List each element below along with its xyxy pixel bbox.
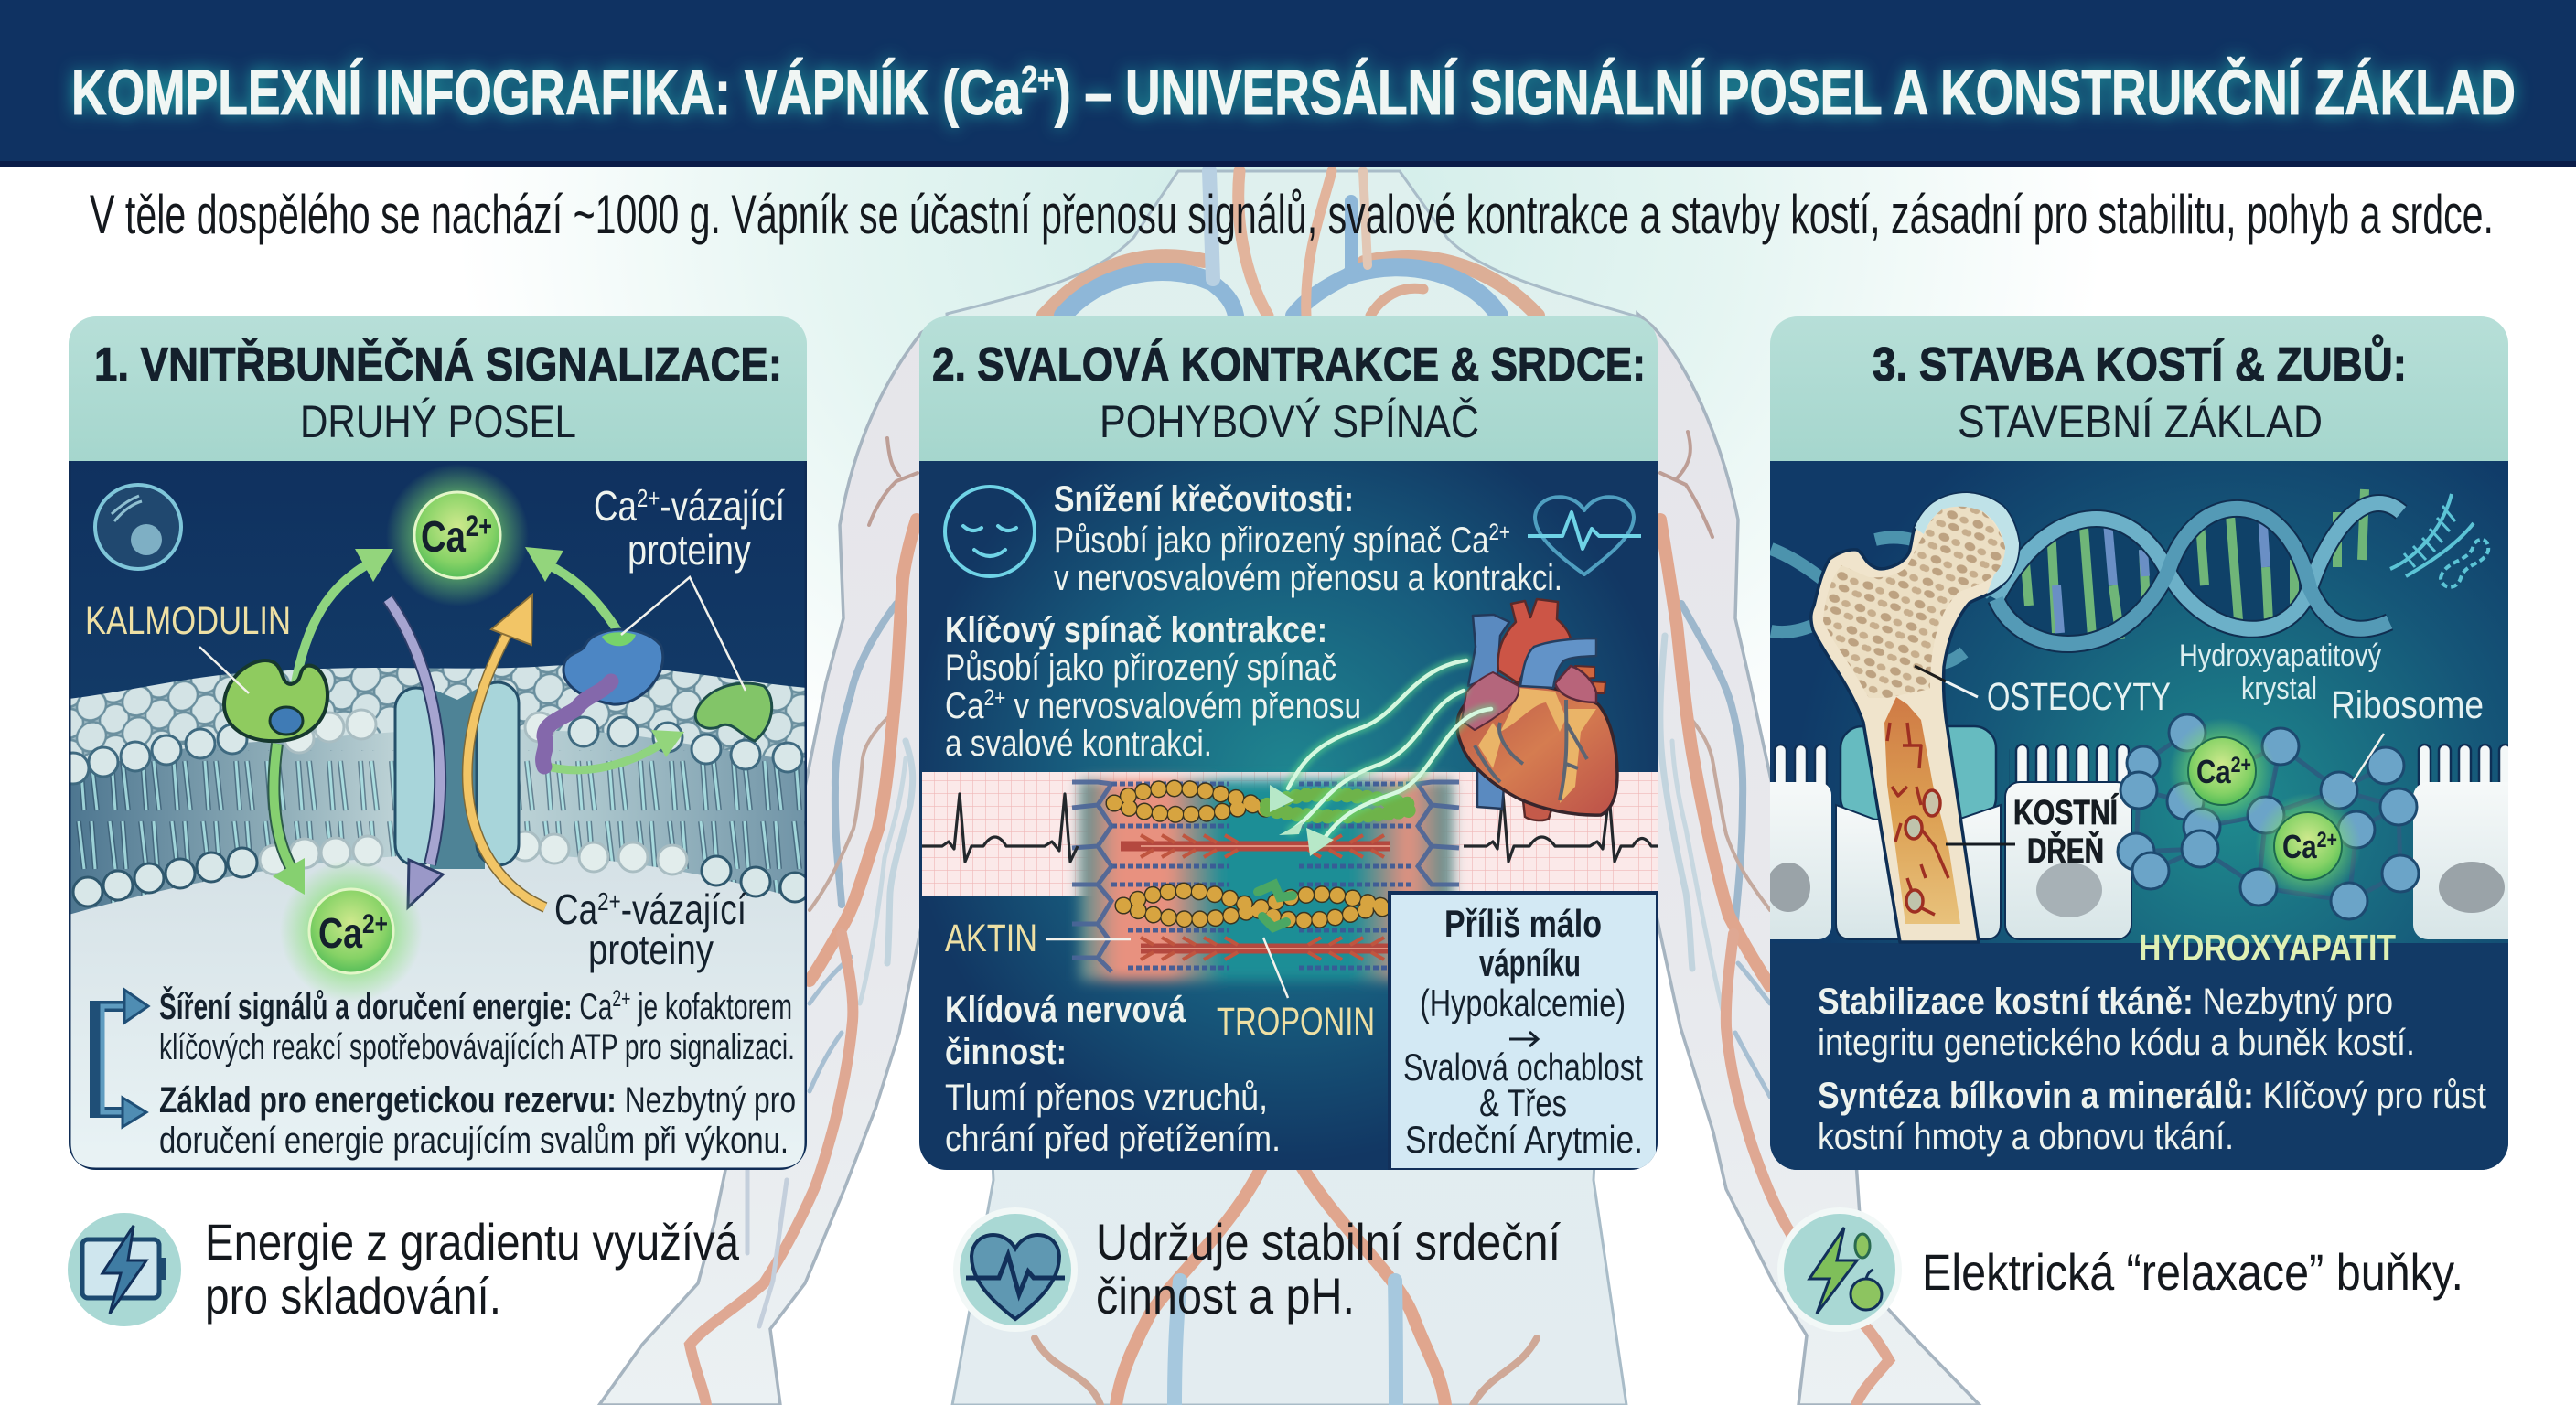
calcium ion top: 2+	[466, 509, 492, 542]
thick filaments	[1121, 835, 1390, 960]
heading: panel 2: 2. SVALOVÁ KONTRAKCE & SRDCE:	[932, 338, 1646, 391]
protein: purple tail	[543, 681, 611, 767]
arrow: leads to	[1509, 1032, 1538, 1046]
label: binding proteins top: -vázající	[660, 482, 785, 530]
text block: panel 3: Stabilizace kostní tkáně: Nezbytný pro	[1818, 981, 2393, 1022]
label: binding proteins bottom: 2+	[597, 887, 621, 916]
fat bands	[1478, 688, 1596, 803]
area below the membrane	[69, 853, 807, 1170]
panel 3 background	[1770, 461, 2508, 1170]
ventricles	[1457, 683, 1617, 815]
text block: contraction switch: v nervosvalovém přenosu	[1005, 686, 1361, 726]
label: binding proteins top: Ca	[594, 482, 648, 530]
text block: panel 1: je kofaktorem	[630, 987, 792, 1027]
vena cava top	[1468, 615, 1509, 686]
icon: small DNA and chain	[2390, 494, 2488, 587]
label: binding proteins bottom: -vázající	[621, 885, 746, 933]
label: binding proteins top	[594, 482, 785, 691]
callout: too little calcium: Příliš málo	[1444, 902, 1602, 945]
label: bone marrow	[1946, 792, 2119, 871]
helix inner shade	[1996, 509, 2310, 644]
text block: panel 1: klíčových reakcí spotřebovávajících ATP pro signalizaci.	[159, 1027, 795, 1067]
DNA rungs	[2024, 489, 2365, 649]
text block: panel 3: kostní hmoty a obnovu tkání.	[1818, 1117, 2234, 1157]
text block: resting nerve activity: Klídová nervová	[945, 990, 1186, 1030]
text block: contraction switch: a svalové kontrakci.	[945, 724, 1212, 764]
membrane tails	[69, 723, 807, 915]
heading: panel 3: STAVEBNÍ ZÁKLAD	[1958, 396, 2323, 447]
text block: panel 1: 2+	[612, 986, 630, 1012]
calcium in crystal: Ca	[2196, 753, 2238, 790]
text block: contraction switch	[945, 610, 1361, 764]
protein: blue binding protein	[564, 629, 663, 704]
label: kalmodulin	[85, 599, 291, 693]
text block: resting nerve activity: činnost:	[945, 1032, 1067, 1072]
label: ribosome	[2331, 683, 2484, 782]
cell membrane	[58, 665, 810, 1170]
label: bone marrow: KOSTNÍ	[2013, 792, 2119, 832]
illustration: femur bone	[1811, 493, 2019, 942]
label: binding proteins bottom: Ca	[554, 885, 608, 933]
callout: too little calcium: (Hypokalcemie)	[1420, 981, 1626, 1024]
actin strands	[1114, 788, 1413, 928]
label: ribosome: Ribosome	[2331, 683, 2484, 727]
vessels in the left arm	[690, 438, 918, 1405]
bone marrow	[1884, 697, 1960, 924]
torso and neck silhouette	[947, 171, 1640, 1405]
bone outline	[1811, 493, 2019, 942]
icon: cell	[95, 485, 181, 569]
text block: reduced cramping: Působí jako přirozený spínač Ca	[1054, 520, 1581, 561]
footer text 1: pro skladování.	[205, 1267, 501, 1325]
right arm	[1637, 314, 1980, 1405]
text block: panel 1: Šíření signálů a doručení energie: Ca	[159, 987, 746, 1027]
arrow: green down from calmodulin	[273, 744, 305, 895]
label: hydroxyapatit: HYDROXYAPATIT	[2139, 927, 2396, 969]
panel: 2 muscle contraction and heart	[919, 316, 1658, 1170]
callout: too little calcium	[1390, 893, 1658, 1170]
label: osteocyty: OSTEOCYTY	[1987, 675, 2171, 719]
text block: reduced cramping: Snížení křečovitosti:	[1054, 479, 1354, 520]
heading: panel 3	[1873, 334, 2407, 447]
panel: 3 bones and teeth	[1756, 316, 2523, 1170]
DNA helix	[1771, 489, 2401, 664]
protein: calmodulin	[224, 660, 327, 741]
label: troponin: TROPONIN	[1217, 1000, 1375, 1044]
epithelial cells	[1756, 726, 2523, 939]
arrow: green to right protein	[544, 730, 684, 770]
footer text 1	[205, 1213, 740, 1325]
ECG strip and muscle	[922, 772, 1658, 981]
heading: panel 1: DRUHÝ POSEL	[300, 396, 576, 447]
myosin dashes	[1111, 784, 1413, 968]
heading: panel 1: 1. VNITŘBUNĚČNÁ SIGNALIZACE:	[94, 338, 782, 391]
calcium ion top	[386, 464, 529, 606]
muscle sarcomere	[1072, 779, 1459, 981]
calcium ion bottom: 2+	[362, 909, 388, 939]
text block: panel 1	[159, 985, 796, 1161]
footer text 2: Udržuje stabilní srdeční	[1096, 1213, 1561, 1271]
label: osteocyty	[1915, 666, 2171, 719]
z-lines	[1072, 782, 1459, 971]
callout: too little calcium: Srdeční Arytmie.	[1405, 1118, 1643, 1161]
callout: too little calcium: Svalová ochablost	[1403, 1046, 1643, 1089]
spongy bone	[1823, 507, 2005, 698]
text block: contraction switch: Působí jako přirozený spínač	[945, 648, 1336, 688]
icon: battery with bolt	[68, 1213, 181, 1326]
icon: bolt and apple	[1777, 1207, 1902, 1332]
pulmonary artery	[1520, 638, 1596, 688]
calcium ion bottom: Ca	[318, 909, 372, 957]
arrow: green up from binding protein	[525, 547, 618, 632]
lower leaflet heads	[73, 848, 810, 906]
arrow: orange outward	[467, 595, 545, 907]
arrow: green up from calmodulin	[295, 549, 393, 688]
text block: panel 3: Syntéza bílkovin a minerálů: Klíčový pro růst	[1818, 1076, 2486, 1116]
femoral head cap	[1915, 493, 2019, 594]
icon: heart pulse	[953, 1207, 1078, 1332]
sarcomere soft base	[1079, 779, 1453, 981]
footer text 2: činnost a pH.	[1096, 1267, 1355, 1325]
crystal bonds	[2136, 733, 2400, 901]
vessels left of the neck	[1044, 171, 1268, 316]
coronary vessels	[1475, 700, 1587, 800]
panel 2 background	[919, 461, 1658, 1170]
vena cava bottom	[1477, 764, 1504, 809]
calcium in crystal	[2169, 718, 2275, 824]
footer text 1: Energie z gradientu využívá	[205, 1213, 740, 1271]
callout: too little calcium: vápníku	[1479, 941, 1581, 984]
right atrium	[1555, 666, 1596, 702]
label: binding proteins top: 2+	[637, 484, 660, 512]
text block: reduced cramping: 2+	[1488, 520, 1510, 545]
panel 3 header band	[1770, 316, 2508, 461]
icon: bracket arrows	[95, 990, 148, 1127]
label: aktin: AKTIN	[945, 917, 1037, 960]
heading: panel 2: POHYBOVÝ SPÍNAČ	[1100, 396, 1479, 447]
heading: panel 3: 3. STAVBA KOSTÍ & ZUBŮ:	[1873, 334, 2407, 391]
text block: contraction switch: Klíčový spínač kontrakce:	[945, 610, 1327, 650]
descending vessel	[1523, 800, 1551, 820]
label: binding proteins bottom: proteiny	[588, 926, 714, 973]
label: troponin	[1217, 938, 1375, 1044]
footer text 2	[1096, 1213, 1561, 1325]
text block: resting nerve activity: chrání před přetížením.	[945, 1119, 1281, 1159]
background: human body with vessels	[599, 171, 1980, 1405]
title: 2+	[1021, 58, 1055, 101]
heading: panel 1	[94, 338, 782, 447]
vessels in the right arm	[1660, 432, 1889, 1405]
molecule: hydroxyapatite crystal: 2+	[2317, 828, 2337, 853]
text block: panel 1: doručení energie pracujícím svalům při výkonu.	[159, 1121, 789, 1161]
text block: contraction switch: 2+	[984, 685, 1005, 711]
footer text 3: Elektrická “relaxace” buňky.	[1922, 1243, 2463, 1301]
label: kalmodulin: KALMODULIN	[85, 599, 291, 643]
label: bone marrow: DŘEŇ	[2027, 831, 2104, 871]
icon: relaxed face	[945, 487, 1035, 576]
left atrium	[1462, 672, 1519, 730]
protein: green right	[695, 683, 772, 741]
calcium ion top: Ca	[421, 513, 477, 562]
text block: panel 3: integritu genetického kódu a buněk kostí.	[1818, 1023, 2415, 1063]
vessels in the lower torso	[1035, 1162, 1537, 1405]
aorta	[1498, 599, 1571, 683]
vessels right of the neck	[1293, 171, 1538, 316]
panel 2 header band	[919, 316, 1658, 461]
ECG traces	[922, 794, 1658, 862]
icon: heart with pulse	[1528, 497, 1641, 574]
text block: panel 3	[1818, 981, 2486, 1157]
title: KOMPLEXNÍ INFOGRAFIKA: VÁPNÍK (Ca	[71, 57, 1316, 128]
upper leaflet front heads	[58, 717, 802, 784]
small orange tabs	[1575, 666, 1605, 693]
illustration: heart	[1457, 599, 1617, 820]
text block: reduced cramping: v nervosvalovém přenosu a kontrakci.	[1054, 558, 1562, 598]
label: binding proteins top: proteiny	[628, 526, 751, 574]
molecule: hydroxyapatite crystal	[2118, 714, 2419, 919]
label: hydroxyapatite crystal	[2179, 638, 2381, 706]
text block: reduced cramping	[1054, 479, 1562, 598]
heading: panel 2	[932, 338, 1646, 447]
panel 1 diagram background	[69, 461, 807, 1170]
calcium ion bottom	[280, 860, 423, 1003]
label: hydroxyapatite crystal: krystal	[2241, 671, 2317, 706]
arrow: purple inward	[388, 599, 443, 907]
text block: contraction switch: Ca	[945, 686, 992, 726]
header banner	[0, 0, 2576, 167]
ion channel	[395, 682, 519, 869]
text block: resting nerve activity	[945, 990, 1281, 1159]
upper leaflet back heads	[71, 665, 805, 761]
left arm	[599, 314, 951, 1405]
text block: panel 1: Základ pro energetickou rezervu: Nezbytný pro	[159, 1080, 796, 1121]
text block: resting nerve activity: Tlumí přenos vzruchů,	[945, 1078, 1268, 1118]
panel: 1 intracellular signalling	[58, 316, 810, 1170]
calcium in crystal: 2+	[2231, 753, 2251, 778]
crystal atoms	[2118, 714, 2419, 919]
callout: too little calcium: & Třes	[1479, 1081, 1567, 1124]
panel 1 header band	[69, 316, 807, 461]
molecule: hydroxyapatite crystal: Ca	[2282, 828, 2324, 865]
label: hydroxyapatite crystal: Hydroxyapatitový	[2179, 638, 2381, 673]
green signal waves	[1270, 660, 1491, 856]
label: binding proteins bottom	[554, 885, 746, 973]
